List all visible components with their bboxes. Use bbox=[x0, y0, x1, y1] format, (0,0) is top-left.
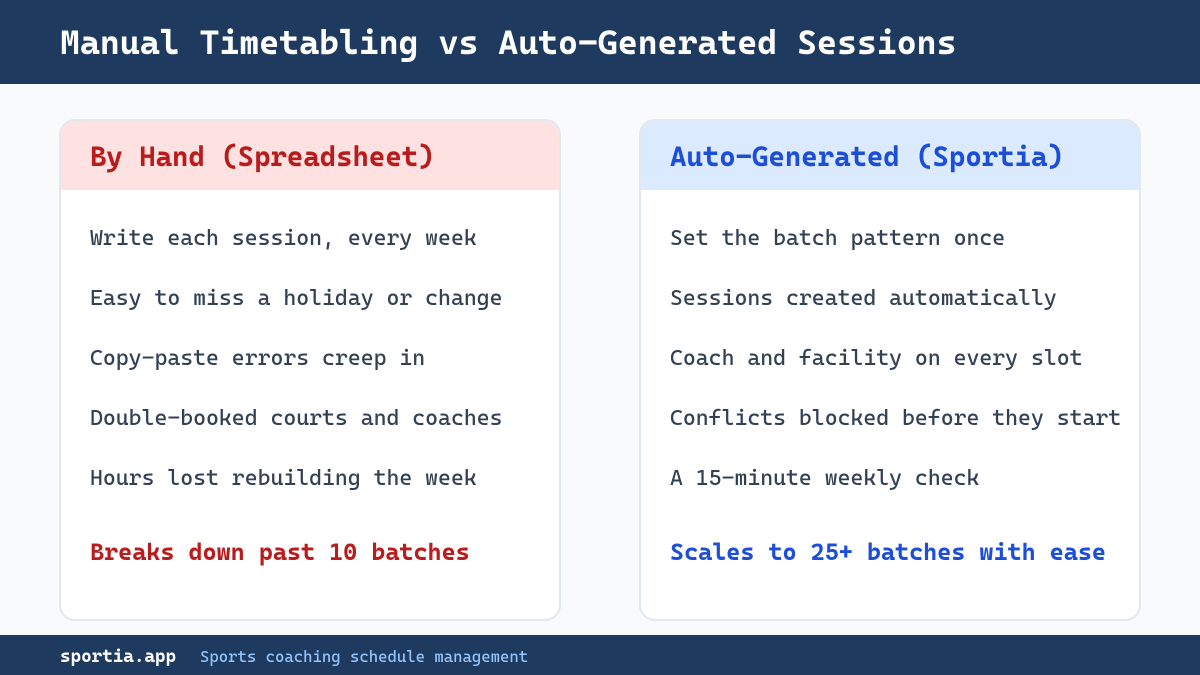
panel heading: auto-generated bbox=[641, 121, 1139, 190]
panel: by hand bbox=[59, 119, 561, 621]
list item: Coach and facility on every slot bbox=[670, 346, 1082, 371]
title: Manual Timetabling vs Auto-Generated Sessions bbox=[60, 22, 956, 62]
panel heading: by hand: By Hand (Spreadsheet) bbox=[90, 140, 435, 173]
panel heading: by hand bbox=[61, 121, 559, 190]
list item: Conflicts blocked before they start bbox=[670, 406, 1121, 431]
header band bbox=[0, 0, 1200, 84]
list item: Sessions created automatically bbox=[670, 286, 1057, 311]
panel: auto-generated bbox=[639, 119, 1141, 621]
takeaway: Scales to 25+ batches with ease bbox=[670, 538, 1106, 566]
list item: Hours lost rebuilding the week bbox=[90, 466, 477, 491]
list item: Easy to miss a holiday or change bbox=[90, 286, 502, 311]
footer brand: sportia.app bbox=[60, 646, 176, 667]
list item: Double-booked courts and coaches bbox=[90, 406, 502, 431]
list item: Set the batch pattern once bbox=[670, 226, 1005, 251]
takeaway: Breaks down past 10 batches bbox=[90, 538, 470, 566]
list item: Write each session, every week bbox=[90, 226, 477, 251]
list item: Copy-paste errors creep in bbox=[90, 346, 425, 371]
list item: A 15-minute weekly check bbox=[670, 466, 979, 491]
footer tagline: Sports coaching schedule management bbox=[200, 647, 528, 666]
panel heading: auto-generated: Auto-Generated (Sportia) bbox=[670, 140, 1064, 173]
footer band bbox=[0, 635, 1200, 675]
